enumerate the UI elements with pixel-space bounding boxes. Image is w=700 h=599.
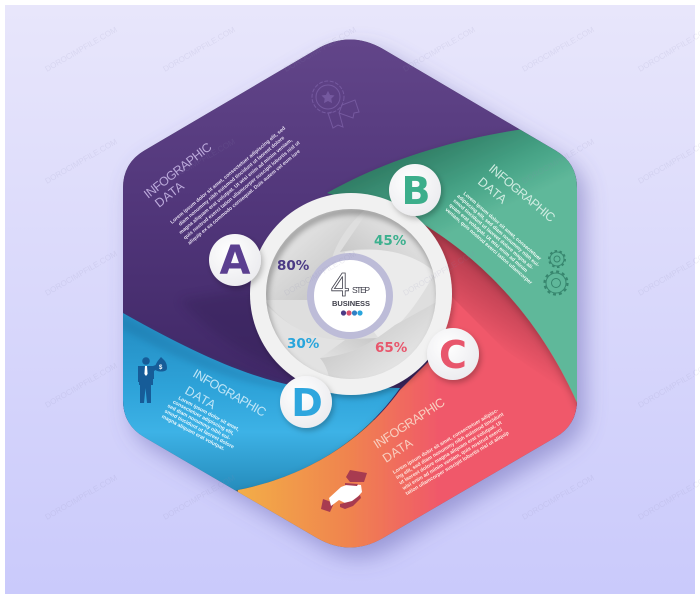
text: blue: smod tincidunt ut laoreet dolore <box>163 409 235 450</box>
circle ring <box>250 193 452 395</box>
percentages: 30% <box>287 336 320 352</box>
text: blue: sed diam nonummy nibh eui- <box>166 403 231 442</box>
text: red: tation ullamcorper suscipit lobortis nisl ut aliquip <box>405 430 510 497</box>
watermarks <box>44 25 700 522</box>
text: red: INFOGRAPHIC <box>371 395 447 452</box>
panel: D blue <box>123 313 400 491</box>
badge B <box>389 164 441 216</box>
text: blue: consectetuer adipiscing elit, <box>172 399 235 437</box>
badge C: C <box>439 333 467 377</box>
icon: businessman: $ <box>159 365 163 371</box>
text: blue: magna aliquam erat volutpat. <box>160 414 226 453</box>
watermarks: DOROCIMPFILE.COM <box>162 473 237 522</box>
step: STEP <box>352 285 370 295</box>
text: green: smod tincidunt ut laoreet dolore magna ali- <box>452 198 535 271</box>
business: BUSINESS <box>332 299 370 308</box>
text: purple: aliquip ex ea commodo consequat. Duis autem vel eum iure <box>187 149 302 246</box>
text: red: ut laoreet dolore magna aliquam erat volutpat. Ut <box>398 420 503 486</box>
centre label <box>310 256 390 336</box>
text: red: Lorem ipsum dolor sit amet, consectetuer adipisc- <box>392 408 500 476</box>
watermarks: DOROCIMPFILE.COM <box>402 25 477 74</box>
text: purple: DATA <box>152 179 187 210</box>
text: green: DATA <box>475 175 510 207</box>
text: blue: DATA <box>182 383 219 412</box>
badge A: A <box>220 238 251 284</box>
watermarks: DOROCIMPFILE.COM <box>44 25 119 74</box>
watermarks: DOROCIMPFILE.COM <box>282 25 358 74</box>
badge B: B <box>402 169 430 213</box>
watermarks: DOROCIMPFILE.COM <box>44 361 119 410</box>
percentages: 65% <box>375 340 408 356</box>
watermarks: DOROCIMPFILE.COM <box>44 473 119 522</box>
watermarks: DOROCIMPFILE.COM <box>520 473 596 522</box>
watermarks: DOROCIMPFILE.COM <box>162 137 237 186</box>
percentages <box>277 233 408 356</box>
percentages: 45% <box>374 233 407 249</box>
text: purple: Lorem ipsum dolor sit amet, consectetuer adipiscing elit, sed <box>169 126 287 226</box>
icon: handshake <box>321 470 367 512</box>
panel: A purple <box>123 40 577 420</box>
watermarks: DOROCIMPFILE.COM <box>520 137 596 186</box>
text: purple: magna aliquam erat volutpat. Ut wisi enim ad minim veniam, <box>178 137 294 236</box>
hexagon diagram <box>119 38 597 566</box>
text: green <box>444 162 558 286</box>
percentages: 80% <box>277 258 310 274</box>
text: red: wisi enim ad minim veniam, quis nostrud exerci <box>401 427 504 492</box>
text: purple: diam nonummy nibh euismod tincidunt ut laoreet dolore <box>178 135 286 228</box>
badge A <box>209 234 261 286</box>
badge D <box>280 376 332 428</box>
text: purple <box>141 124 306 246</box>
badge D: D <box>291 381 323 425</box>
watermarks: DOROCIMPFILE.COM <box>162 25 237 74</box>
icon: businessman <box>138 357 167 403</box>
numeral 4: 4 <box>331 266 349 303</box>
text: purple: INFOGRAPHIC <box>141 140 214 201</box>
text: purple: quis nostrud exerci tation ullamcorper suscipit lobortis nisl ut <box>183 140 302 241</box>
panel: C red orange <box>238 225 577 548</box>
text: blue: Lorem ipsum dolor sit amet, <box>177 395 241 433</box>
text: red: ing elit, sed diam nonummy nibh euismod tincidunt <box>395 412 505 481</box>
icon: gears <box>544 251 568 294</box>
watermarks: DOROCIMPFILE.COM <box>402 249 477 298</box>
badge C <box>427 328 479 380</box>
text: green: adipiscing elit, sed diam nonummy nibh eui- <box>455 194 541 269</box>
text: blue <box>160 366 269 456</box>
icon: rosette <box>312 81 359 128</box>
watermarks: DOROCIMPFILE.COM <box>282 249 358 298</box>
text: red: DATA <box>380 435 416 466</box>
text: red <box>371 395 515 497</box>
text: green: INFOGRAPHIC <box>486 162 558 225</box>
text: blue: INFOGRAPHIC <box>190 366 269 420</box>
text: green: veniam, quis nostrud exerci tation ullamcorper <box>444 207 533 286</box>
watermarks: DOROCIMPFILE.COM <box>44 249 119 298</box>
colour dots <box>341 310 363 316</box>
panel: B green <box>327 130 577 410</box>
watermarks: DOROCIMPFILE.COM <box>520 25 596 74</box>
text: green: quam erat volutpat. Ut wisi enim ad minim <box>448 203 529 274</box>
grey iris centre <box>266 209 436 379</box>
watermarks: DOROCIMPFILE.COM <box>44 137 119 186</box>
text: green: Lorem ipsum dolor sit amet, consectetuer <box>462 191 542 262</box>
